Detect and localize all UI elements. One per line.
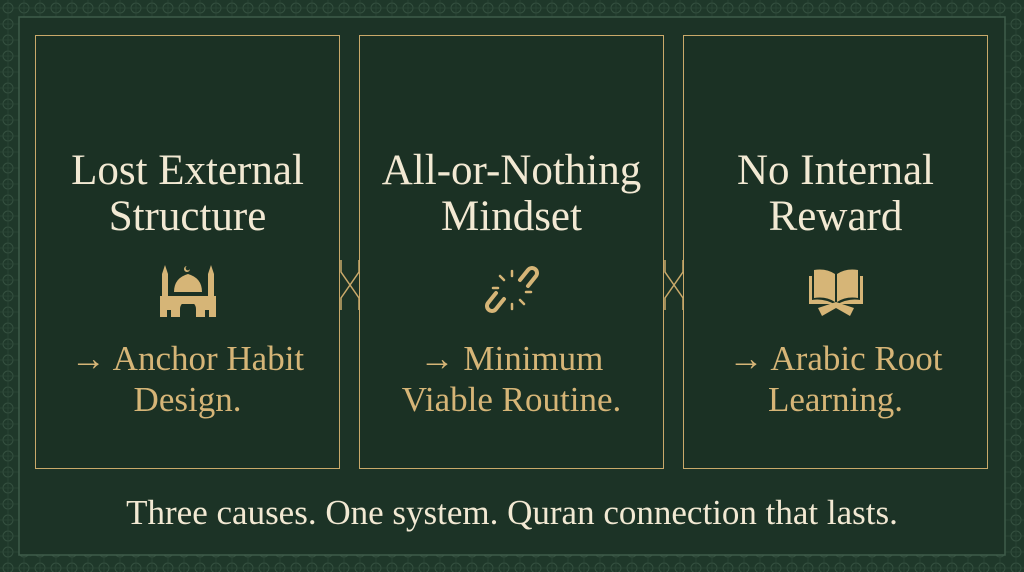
connector: right — [664, 260, 683, 310]
heading: Reward — [769, 193, 902, 240]
action text: → Minimum — [420, 339, 603, 378]
action text: → Anchor Habit — [71, 339, 304, 378]
panel: all-or-nothing — [359, 35, 664, 469]
heading: Structure — [109, 193, 266, 240]
heading: Mindset — [441, 193, 582, 240]
action text: Viable Routine. — [402, 380, 621, 419]
action text — [729, 339, 942, 419]
panel: lost external structure — [35, 35, 340, 469]
heading: Lost External — [71, 147, 304, 194]
connector: left — [340, 260, 359, 310]
action text — [71, 339, 304, 419]
action text — [402, 339, 621, 419]
icon: mosque — [160, 265, 216, 317]
action text: → Arabic Root — [729, 339, 942, 378]
heading — [382, 147, 641, 240]
panel: no internal reward — [683, 35, 988, 469]
action text: Learning. — [768, 380, 903, 419]
heading — [737, 147, 934, 240]
footer tagline: Three causes. One system. Quran connection that lasts. — [126, 493, 898, 532]
icon: broken chain — [485, 266, 539, 313]
heading: All-or-Nothing — [382, 147, 641, 194]
action text: Design. — [134, 380, 241, 419]
heading — [71, 147, 304, 240]
heading: No Internal — [737, 147, 934, 194]
icon: open book — [809, 270, 863, 316]
